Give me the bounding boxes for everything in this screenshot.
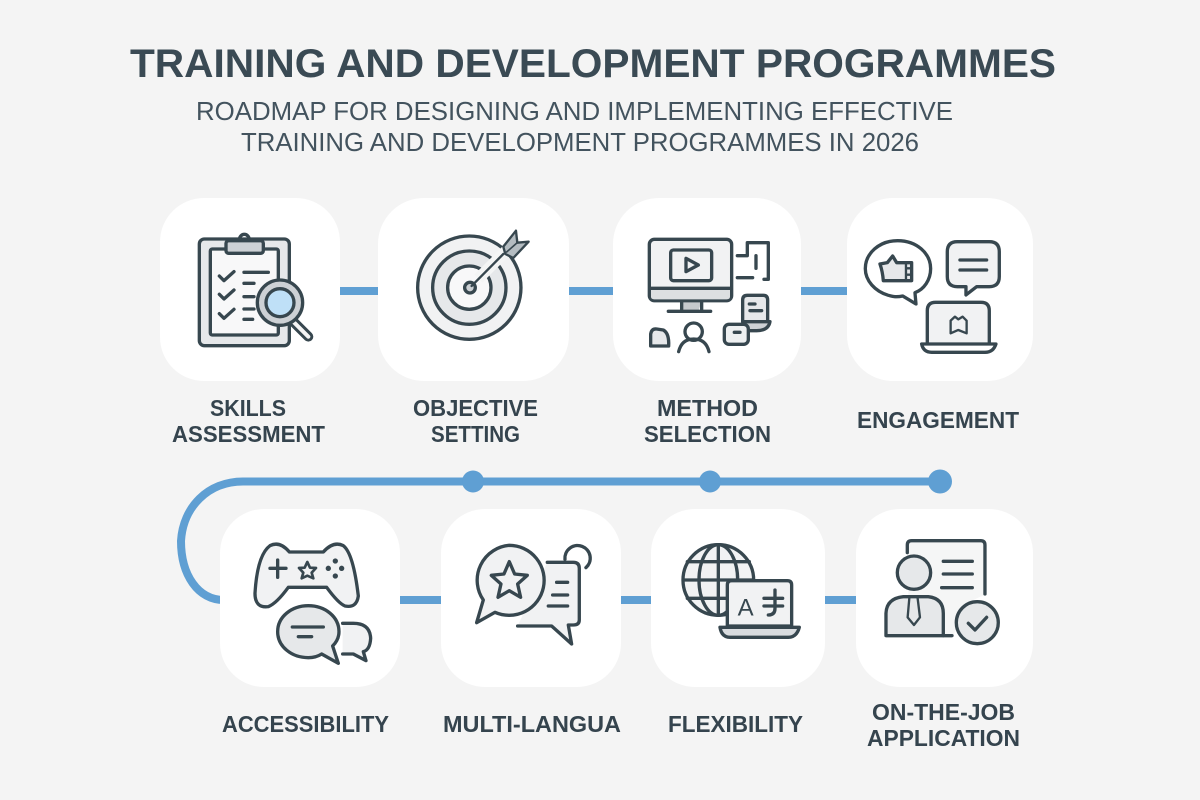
connector lines: bottom row: [400, 596, 856, 604]
icon: globe and laptop with characters: [683, 545, 799, 637]
connector lines: top row: [340, 287, 847, 295]
panel: on-the-job application: [856, 509, 1033, 687]
label: engagement: ENGAGEMENT: [857, 407, 1019, 433]
panel: method selection: [613, 198, 801, 381]
icon: clipboard with magnifier: [199, 234, 308, 346]
label: objective setting: [413, 395, 538, 447]
subtitle: TRAINING AND DEVELOPMENT PROGRAMMES IN 2026: [241, 129, 919, 157]
icon: game controller and chat: [255, 544, 371, 663]
label: objective setting: SETTING: [431, 421, 520, 447]
label: method selection: SELECTION: [644, 421, 771, 447]
panel: objective setting: [378, 198, 569, 381]
icon: employee, document and check badge: [886, 541, 998, 644]
panel: skills assessment: [160, 198, 340, 381]
label: flexibility: FLEXIBILITY: [668, 711, 803, 737]
subtitle: [196, 98, 953, 157]
icon: globe and laptop with characters: A: [738, 594, 754, 621]
icon: monitor and learning media: [649, 239, 770, 352]
label: method selection: METHOD: [657, 395, 758, 421]
icon: target with arrow: [418, 231, 529, 339]
label: accessibility: ACCESSIBILITY: [222, 711, 389, 737]
icon: chat bubbles and laptop: [865, 241, 999, 352]
label: on-the-job application: ON-THE-JOB: [872, 699, 1015, 725]
panel: accessibility: [220, 509, 400, 687]
label: method selection: [644, 395, 771, 447]
connector path: curved return with nodes: [181, 470, 952, 600]
panel: multi-language: [441, 509, 621, 687]
label: objective setting: OBJECTIVE: [413, 395, 538, 421]
panel: flexibility: [651, 509, 825, 687]
label: multi-language (truncated in source): MULTI-LANGUA: [443, 711, 621, 737]
label: skills assessment: [172, 395, 325, 447]
label: on-the-job application: [867, 699, 1020, 751]
label: skills assessment: SKILLS: [210, 395, 286, 421]
label: skills assessment: ASSESSMENT: [172, 421, 325, 447]
label: on-the-job application: APPLICATION: [867, 725, 1020, 751]
panel: engagement: [847, 198, 1033, 381]
title: TRAINING AND DEVELOPMENT PROGRAMMES: [130, 42, 1056, 86]
icon: star speech bubble and document: [477, 545, 590, 644]
subtitle: ROADMAP FOR DESIGNING AND IMPLEMENTING EFFECTIVE: [196, 98, 953, 126]
